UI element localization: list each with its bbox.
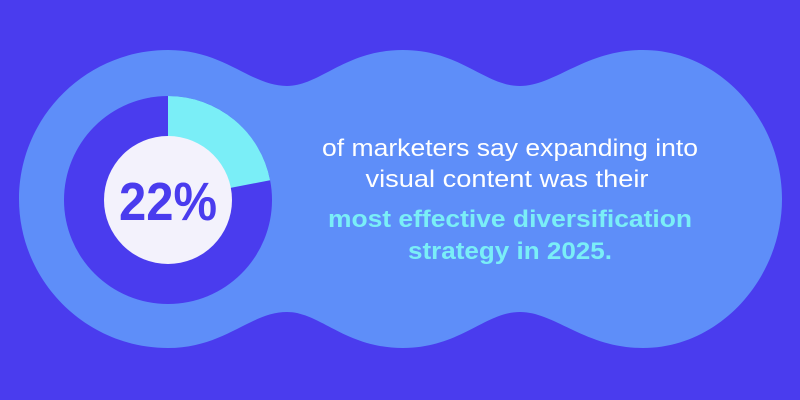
donut chart: 22% xyxy=(64,96,272,304)
blob background shape xyxy=(19,50,782,348)
statement text: visual content was their xyxy=(366,166,648,193)
statement text xyxy=(322,135,698,265)
statement text: strategy in 2025. xyxy=(408,238,612,265)
statement text: most effective diversification xyxy=(328,206,692,233)
statement text: of marketers say expanding into xyxy=(322,135,698,162)
stat value: 22% xyxy=(119,172,217,232)
